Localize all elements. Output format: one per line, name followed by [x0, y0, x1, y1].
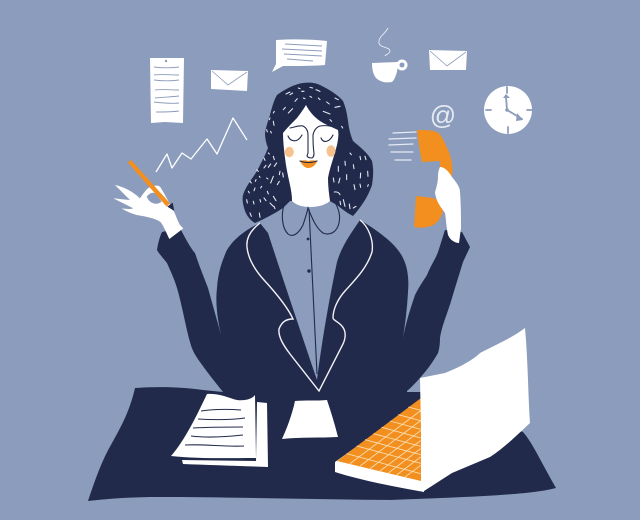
pencil	[128, 160, 174, 211]
envelope: right	[429, 50, 467, 70]
lips	[300, 160, 317, 168]
document	[150, 58, 184, 123]
papers	[171, 394, 268, 467]
keyboard	[337, 398, 421, 481]
collar and shirt placket	[282, 201, 340, 374]
hair highlights	[247, 87, 368, 217]
keyboard grid	[347, 407, 421, 477]
back sheet	[182, 402, 268, 467]
desk	[88, 387, 556, 501]
coffee cup	[372, 28, 406, 82]
cheeks	[285, 145, 336, 157]
finger gap	[147, 193, 162, 204]
phone handset	[414, 130, 452, 228]
envelope: left	[211, 70, 248, 91]
right hand	[435, 167, 461, 243]
jacket and arms	[157, 220, 470, 400]
line chart	[156, 118, 247, 172]
laptop base	[335, 398, 424, 492]
left hand	[113, 160, 183, 239]
laptop	[335, 328, 530, 492]
center note	[282, 400, 338, 439]
paper text lines	[185, 409, 245, 446]
hand	[113, 185, 183, 239]
facial line work	[288, 126, 338, 162]
hair	[243, 83, 373, 223]
at sign: @	[430, 100, 456, 130]
lapel outline	[247, 220, 372, 391]
clock	[484, 86, 532, 134]
speech bubble	[272, 39, 327, 72]
front sheet	[171, 394, 256, 458]
laptop screen	[420, 328, 530, 491]
sound lines	[389, 132, 416, 160]
steam	[379, 28, 390, 56]
face	[283, 105, 338, 207]
